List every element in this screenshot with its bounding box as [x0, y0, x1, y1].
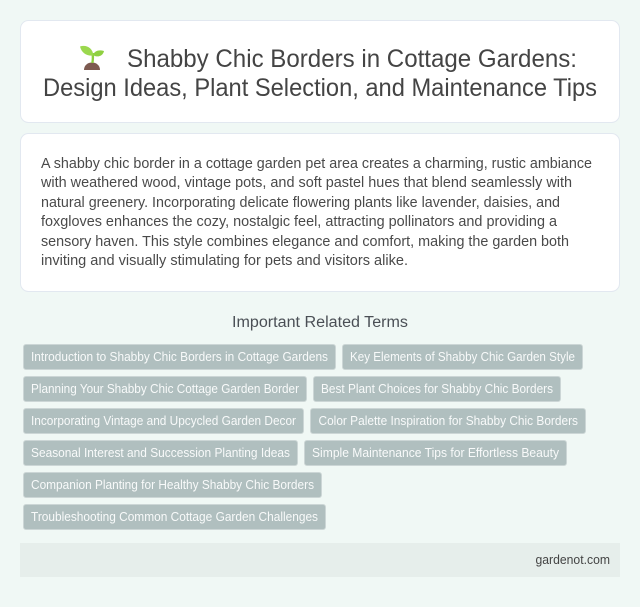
footer source text: gardenot.com [536, 553, 610, 567]
chip: troubleshooting: Troubleshooting Common Cottage Garden Challenges [31, 510, 318, 524]
chip: color palette [310, 408, 586, 434]
chip: best plants: Best Plant Choices for Shabby Chic Borders [321, 382, 553, 396]
panel: related term chips [24, 344, 586, 530]
text block: description paragraph [40, 156, 592, 269]
chip: key elements [342, 344, 582, 370]
title: Shabby Chic Borders in Cottage Gardens: [127, 45, 577, 73]
text block: description paragraph: A shabby chic border in a cottage garden pet area creates a charming, rustic ambiance [41, 156, 592, 172]
text block: description paragraph: sensory haven. This style combines elegance and comfort, making the garden both [41, 234, 569, 250]
chip: introduction: Introduction to Shabby Chic Borders in Cottage Gardens [31, 350, 328, 364]
chip: introduction [24, 344, 336, 370]
chip: planning [24, 376, 306, 402]
footer bar [20, 543, 620, 577]
title [43, 45, 597, 102]
heading: related terms: Important Related Terms [232, 314, 408, 331]
text block: description paragraph: inviting and visually stimulating for pets and visitors alike. [41, 253, 408, 269]
chip: planning: Planning Your Shabby Chic Cottage Garden Border [31, 382, 299, 396]
chip: vintage decor: Incorporating Vintage and Upcycled Garden Decor [31, 414, 296, 428]
chip: vintage decor [24, 408, 304, 434]
chip: companion planting [24, 472, 322, 498]
title: Design Ideas, Plant Selection, and Maintenance Tips [43, 74, 597, 102]
chip: seasonal interest [24, 440, 298, 466]
chip: maintenance: Simple Maintenance Tips for Effortless Beauty [312, 446, 560, 460]
text block: description paragraph: with weathered wood, vintage pots, and soft pastel hues that blend seamlessly with [40, 175, 572, 191]
chip: color palette: Color Palette Inspiration for Shabby Chic Borders [318, 414, 578, 428]
chip: key elements: Key Elements of Shabby Chic Garden Style [350, 350, 575, 364]
panel: description [20, 134, 620, 292]
chip: companion planting: Companion Planting for Healthy Shabby Chic Borders [31, 478, 314, 492]
icon: seedling [80, 46, 104, 70]
chip: troubleshooting [24, 504, 326, 530]
chip: seasonal interest: Seasonal Interest and Succession Planting Ideas [31, 446, 290, 460]
text block: description paragraph: foxgloves enhances the cozy, nostalgic feel, attracting pollinators and providing a [41, 214, 558, 230]
chip: best plants [314, 376, 560, 402]
text block: description paragraph: natural greenery. Incorporating delicate flowering plants like lavender, daisies, and [41, 195, 560, 211]
chip: maintenance [304, 440, 566, 466]
panel: title card [20, 20, 620, 122]
